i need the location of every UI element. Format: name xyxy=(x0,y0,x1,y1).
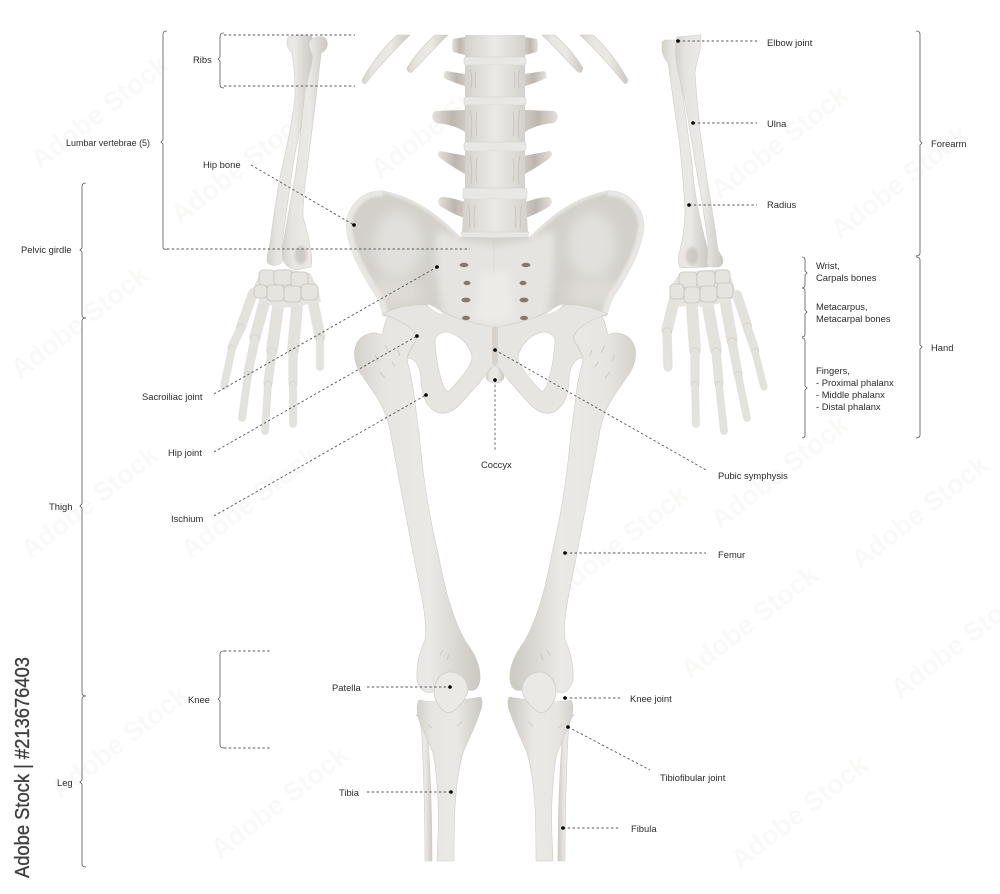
bracket: forearm: Forearm xyxy=(931,138,967,149)
watermark: Adobe Stock xyxy=(365,59,515,185)
pelvis (right half) xyxy=(490,191,644,413)
femur, tibia and fibula (right leg) xyxy=(508,317,636,861)
watermark: Adobe Stock xyxy=(25,49,175,175)
callout: pubic symphysis: Pubic symphysis xyxy=(718,470,788,481)
watermark: Adobe Stock xyxy=(705,79,855,205)
callout: coccyx: Coccyx xyxy=(481,459,512,470)
watermark: Adobe Stock xyxy=(705,409,855,535)
callout: coccyx xyxy=(481,378,512,470)
callout: elbow joint: Elbow joint xyxy=(767,37,813,48)
callout: radius: Radius xyxy=(767,199,796,210)
bracket: lumbar vertebrae xyxy=(66,31,470,249)
left forearm xyxy=(267,35,327,270)
watermark: Adobe Stock xyxy=(205,739,355,865)
bracket: leg xyxy=(57,696,86,867)
watermark: Adobe Stock xyxy=(845,449,995,575)
bracket: metacarpus: Metacarpus, xyxy=(816,301,868,312)
bracket: ribs xyxy=(193,33,355,88)
callout: elbow joint xyxy=(676,37,813,48)
bracket: wrist, carpals: Carpals bones xyxy=(816,272,877,283)
bracket: knee: Knee xyxy=(188,694,210,705)
watermark: Adobe Stock xyxy=(45,679,195,805)
callout: hip bone xyxy=(203,159,356,227)
callout: hip joint: Hip joint xyxy=(168,447,202,458)
pelvis (left half) xyxy=(346,191,500,413)
bracket: hand xyxy=(916,257,953,438)
bracket: wrist, carpals xyxy=(802,257,877,288)
bracket: fingers: - Proximal phalanx xyxy=(816,377,894,388)
callout: tibia: Tibia xyxy=(339,787,360,798)
bracket: ribs: Ribs xyxy=(193,54,212,65)
bracket: fingers xyxy=(802,338,894,438)
watermark: Adobe Stock xyxy=(545,479,695,605)
right forearm xyxy=(662,35,723,268)
bracket: metacarpus: Metacarpal bones xyxy=(816,313,891,324)
bracket: metacarpus xyxy=(802,288,891,337)
watermark: Adobe Stock xyxy=(725,749,875,875)
stock credit: Adobe Stock | #213676403 xyxy=(12,657,34,878)
callout: radius xyxy=(687,199,796,210)
watermark: Adobe Stock xyxy=(165,104,315,230)
callout: tibiofibular joint: Tibiofibular joint xyxy=(660,772,726,783)
callout: patella: Patella xyxy=(332,682,361,693)
callout: knee joint: Knee joint xyxy=(630,693,672,704)
bracket: lumbar vertebrae: Lumbar vertebrae (5) xyxy=(66,137,150,148)
lumbar spine xyxy=(432,35,558,246)
callout: fibula xyxy=(561,823,657,834)
callout: ulna: Ulna xyxy=(767,118,787,129)
watermark: Adobe Stock xyxy=(15,439,165,565)
callout: ulna xyxy=(691,118,787,129)
bracket: thigh xyxy=(49,318,86,696)
watermark: Adobe Stock xyxy=(675,559,825,685)
callout: femur xyxy=(563,549,745,560)
femur, tibia and fibula (left leg) xyxy=(354,317,482,861)
watermark: Adobe Stock xyxy=(5,259,155,385)
watermark: Adobe Stock xyxy=(825,119,975,245)
callout: patella xyxy=(332,682,452,693)
right hand xyxy=(667,269,764,431)
coccyx xyxy=(486,365,504,383)
bracket: pelvic girdle: Pelvic girdle xyxy=(21,244,72,255)
bracket: fingers: - Middle phalanx xyxy=(816,389,885,400)
callout: ischium xyxy=(171,393,428,524)
callout: hip joint xyxy=(168,334,419,458)
bracket: pelvic girdle xyxy=(21,183,86,318)
callout: ischium: Ischium xyxy=(171,513,203,524)
callout: tibia xyxy=(339,787,453,798)
bracket: fingers: - Distal phalanx xyxy=(816,401,881,412)
bracket: fingers: Fingers, xyxy=(816,365,850,376)
left hand xyxy=(224,269,321,431)
callout: femur: Femur xyxy=(718,549,745,560)
callout: sacroiliac joint: Sacroiliac joint xyxy=(142,391,203,402)
callout: fibula: Fibula xyxy=(631,823,657,834)
callout: sacroiliac joint xyxy=(142,265,439,402)
bracket: forearm xyxy=(916,31,967,256)
bracket: wrist, carpals: Wrist, xyxy=(816,260,840,271)
ribs xyxy=(362,35,628,84)
callout: knee joint xyxy=(563,693,672,704)
bracket: knee xyxy=(188,651,272,748)
callout: hip bone: Hip bone xyxy=(203,159,241,170)
bracket: leg: Leg xyxy=(57,777,73,788)
bracket: thigh: Thigh xyxy=(49,501,72,512)
callout: pubic symphysis xyxy=(493,348,788,481)
sacrum centre and pubic symphysis xyxy=(476,272,514,367)
watermark: Adobe Stock xyxy=(175,439,325,565)
bracket: hand: Hand xyxy=(931,342,953,353)
callout: tibiofibular joint xyxy=(566,725,726,783)
